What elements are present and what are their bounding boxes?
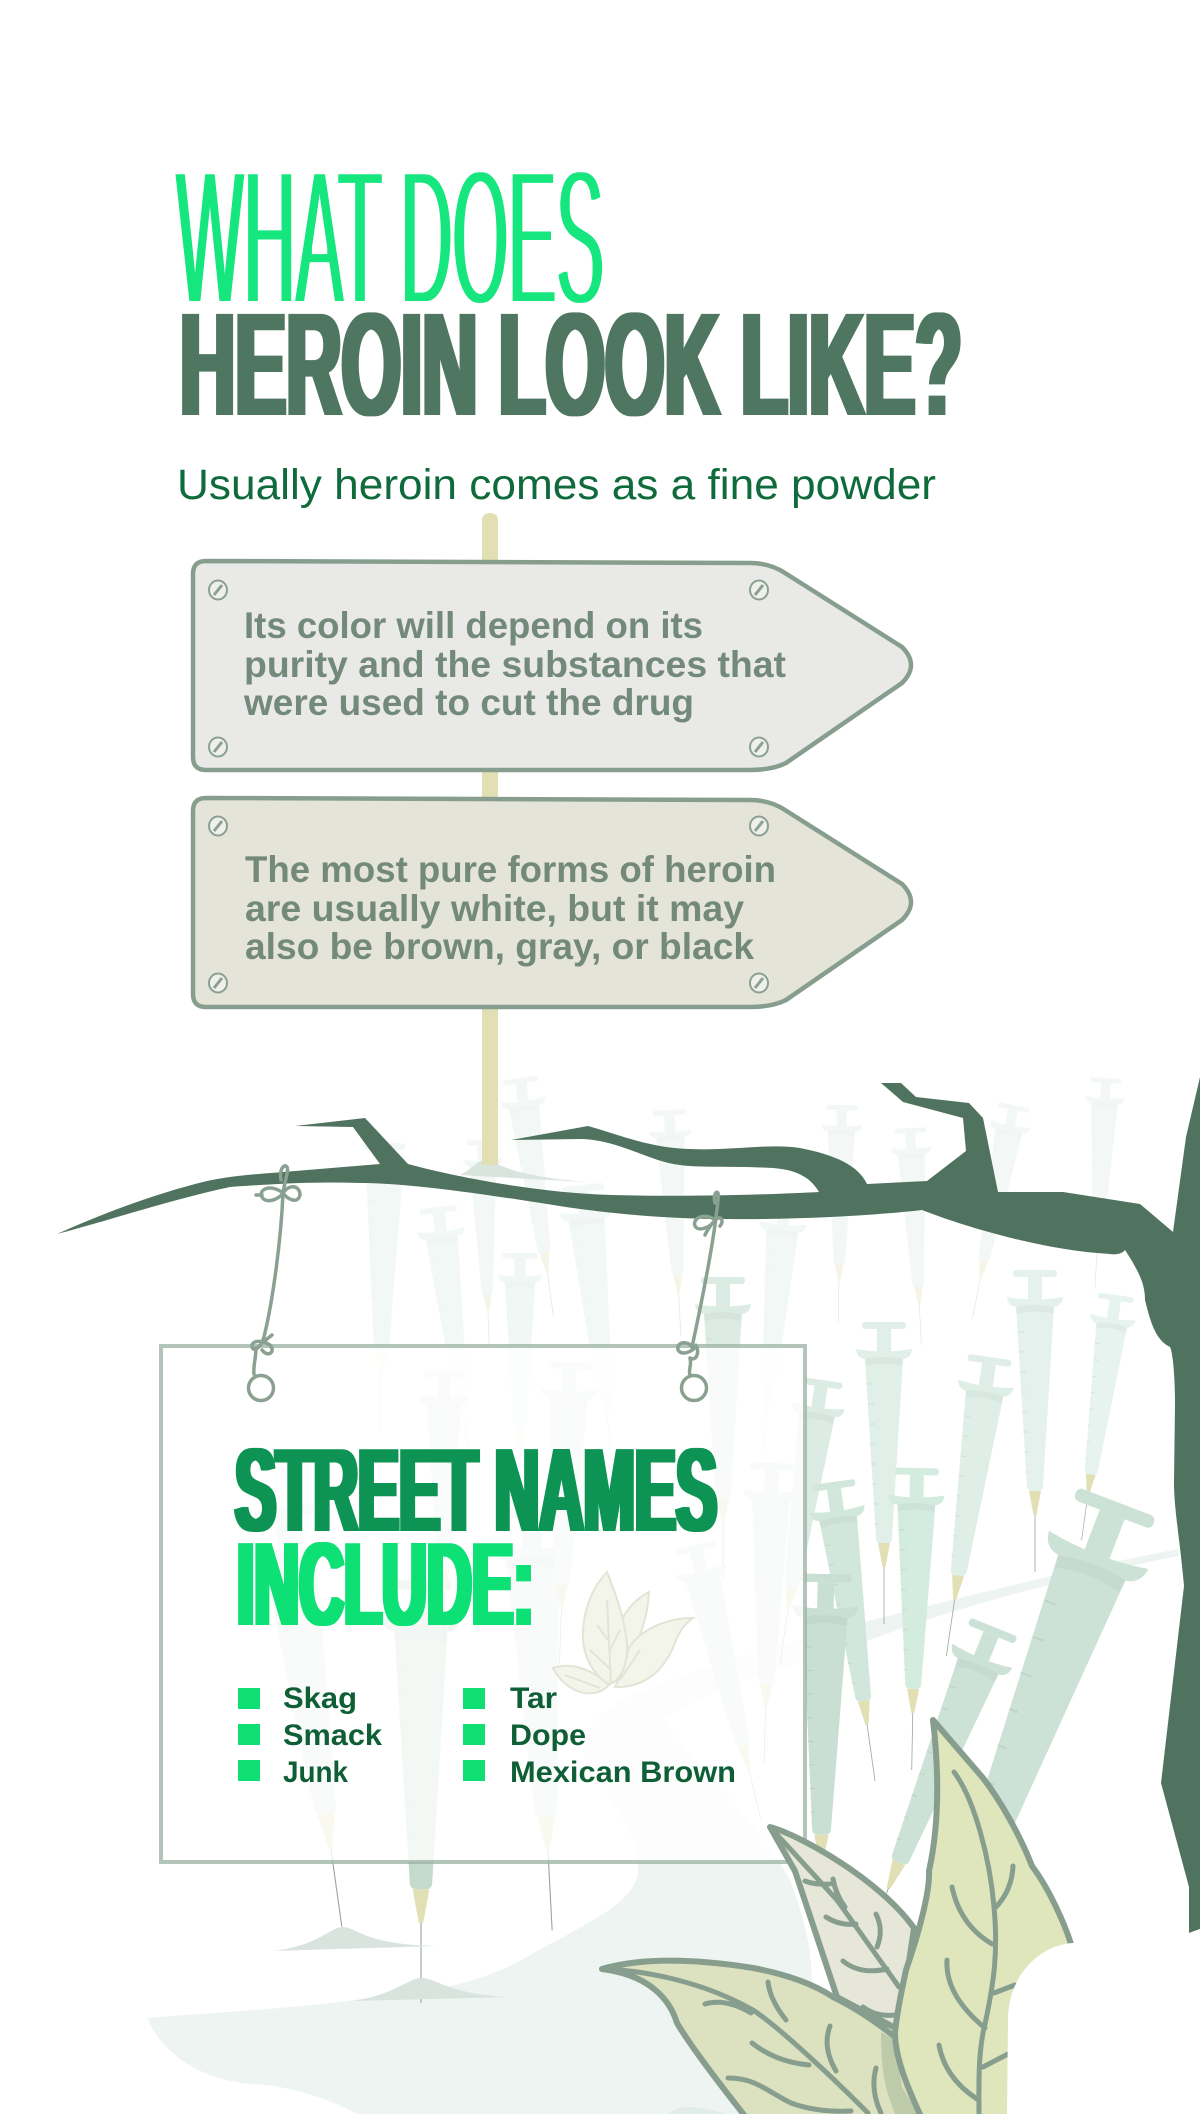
white cut-out over leaf	[1007, 1929, 1200, 2114]
hanging panel: street names	[161, 1346, 805, 1862]
leaf: back	[770, 1827, 914, 2030]
bullet list: Tar	[510, 1682, 557, 1715]
sign 2 text: The most pure forms of heroin	[245, 849, 776, 890]
heading: street names include	[235, 1424, 717, 1651]
signpost arrow 1	[193, 561, 911, 770]
hanging strings and rings	[248, 1166, 722, 1400]
screws	[209, 816, 768, 992]
sign 1 text: Its color will depend on its	[244, 605, 703, 646]
leaf: front right	[895, 1720, 1071, 2114]
faint syringes in the distance	[353, 1075, 1126, 1495]
signpost arrow 2	[193, 798, 911, 1007]
sign 1 text	[243, 605, 786, 723]
bullet list: Dope	[510, 1719, 586, 1752]
sign post	[482, 513, 498, 1165]
bullet list: Junk	[283, 1756, 348, 1789]
icon: faint leaves	[553, 1572, 693, 1693]
leaf: bottom left	[602, 1961, 925, 2114]
sign 1 text: purity and the substances that	[244, 644, 786, 685]
powder piles	[274, 1160, 604, 2001]
sign 2 text	[245, 849, 776, 967]
bullet list	[238, 1682, 736, 1789]
bullet list: Mexican Brown	[510, 1756, 736, 1789]
syringes	[244, 1270, 1167, 2057]
sign 2 text: are usually white, but it may	[245, 888, 744, 929]
subtitle: Usually heroin comes as a fine powder	[177, 461, 936, 509]
sign 2 text: also be brown, gray, or black	[245, 926, 754, 967]
bullet list: Smack	[283, 1719, 382, 1752]
bullet list: Skag	[283, 1682, 357, 1715]
tree branch	[57, 1077, 1200, 1933]
heading: street names include: INCLUDE:	[237, 1518, 534, 1651]
heading: street names include: STREET NAMES	[235, 1424, 717, 1557]
sign 1 text: were used to cut the drug	[243, 682, 694, 723]
ground	[147, 1549, 1178, 2114]
screws	[209, 580, 768, 756]
